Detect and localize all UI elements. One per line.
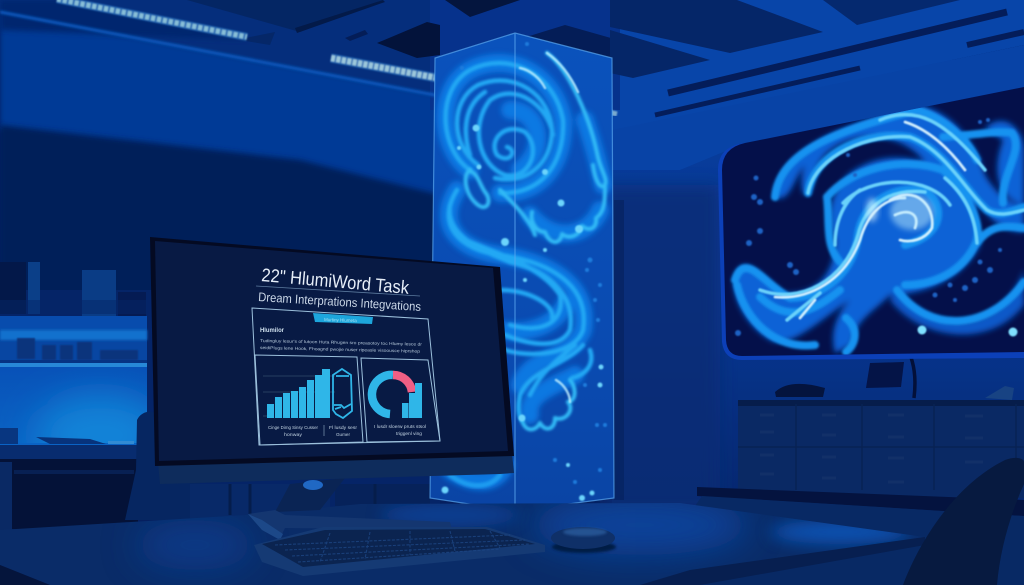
monitor — [150, 237, 514, 540]
small bars — [402, 383, 422, 418]
right chart caption — [374, 424, 426, 436]
swirl glow — [446, 63, 603, 481]
right cabinets — [640, 345, 1024, 585]
ceiling light: left strip — [57, 0, 247, 37]
back cabinets under monitor — [190, 484, 430, 520]
panel body text: Tudingluy lesur's of lutoon Huta Rhugen sro preasotoy toc Hlumy lesce dr — [260, 338, 423, 347]
monitor stand — [248, 478, 452, 540]
holographic pillar — [430, 33, 624, 511]
keyboard — [254, 527, 545, 576]
panel body text: seidiPlugs lene Hook, Fhoagnd pwojie nuser ripeasle visoousce hiprshop — [260, 345, 421, 354]
screen subtitle: Dream Interprations Integvations — [258, 290, 421, 314]
right chart card — [361, 358, 440, 442]
panel heading: Hlumilor — [260, 327, 284, 334]
bright highlights — [520, 53, 578, 402]
right chart caption: I lusdr sloerw pruts stsol — [374, 424, 426, 429]
icon: capsule gauge — [333, 369, 352, 418]
ceiling panels and lights — [57, 0, 1024, 115]
right wall — [612, 60, 1024, 510]
screen — [155, 241, 508, 461]
bar chart — [267, 369, 330, 418]
bright strands — [760, 114, 1024, 320]
panel body text — [260, 338, 423, 354]
dashboard panel — [252, 308, 440, 445]
monitor bezel — [158, 453, 514, 484]
mouse — [551, 527, 616, 553]
panel tab: Murtiny Hlumeta — [324, 317, 357, 323]
left shelves — [0, 262, 165, 530]
white core strands — [775, 122, 965, 318]
spiral strands — [446, 63, 591, 420]
swirl artwork — [734, 105, 1024, 353]
mid strands — [735, 110, 1024, 352]
right chart caption: triggenl ving — [396, 431, 422, 436]
panel tab — [313, 313, 373, 324]
screen title: 22" HlumiWord Task — [261, 264, 411, 298]
star particles — [442, 124, 604, 501]
donut chart — [372, 375, 412, 414]
left chart caption: Gumer — [336, 432, 350, 437]
left chart caption: honway — [284, 432, 303, 437]
ceiling light: center strip — [331, 58, 437, 78]
office chair — [903, 458, 1024, 585]
filled swirl body — [734, 105, 1024, 353]
left chart caption: Cinge Dimg Sinsy Cusser — [268, 425, 318, 430]
bottom swirl remnant — [450, 475, 500, 486]
chair silhouette behind monitor — [125, 412, 200, 520]
pillar glass edges — [430, 33, 614, 511]
wall screen — [718, 87, 1024, 360]
left chart card — [255, 355, 363, 445]
left chart caption: Fl lusdy sesr — [329, 425, 357, 430]
face profile strand — [466, 53, 606, 429]
left chart caption — [268, 425, 357, 437]
upper ceiling — [0, 0, 440, 95]
left wall — [0, 120, 440, 520]
desk — [0, 495, 925, 585]
